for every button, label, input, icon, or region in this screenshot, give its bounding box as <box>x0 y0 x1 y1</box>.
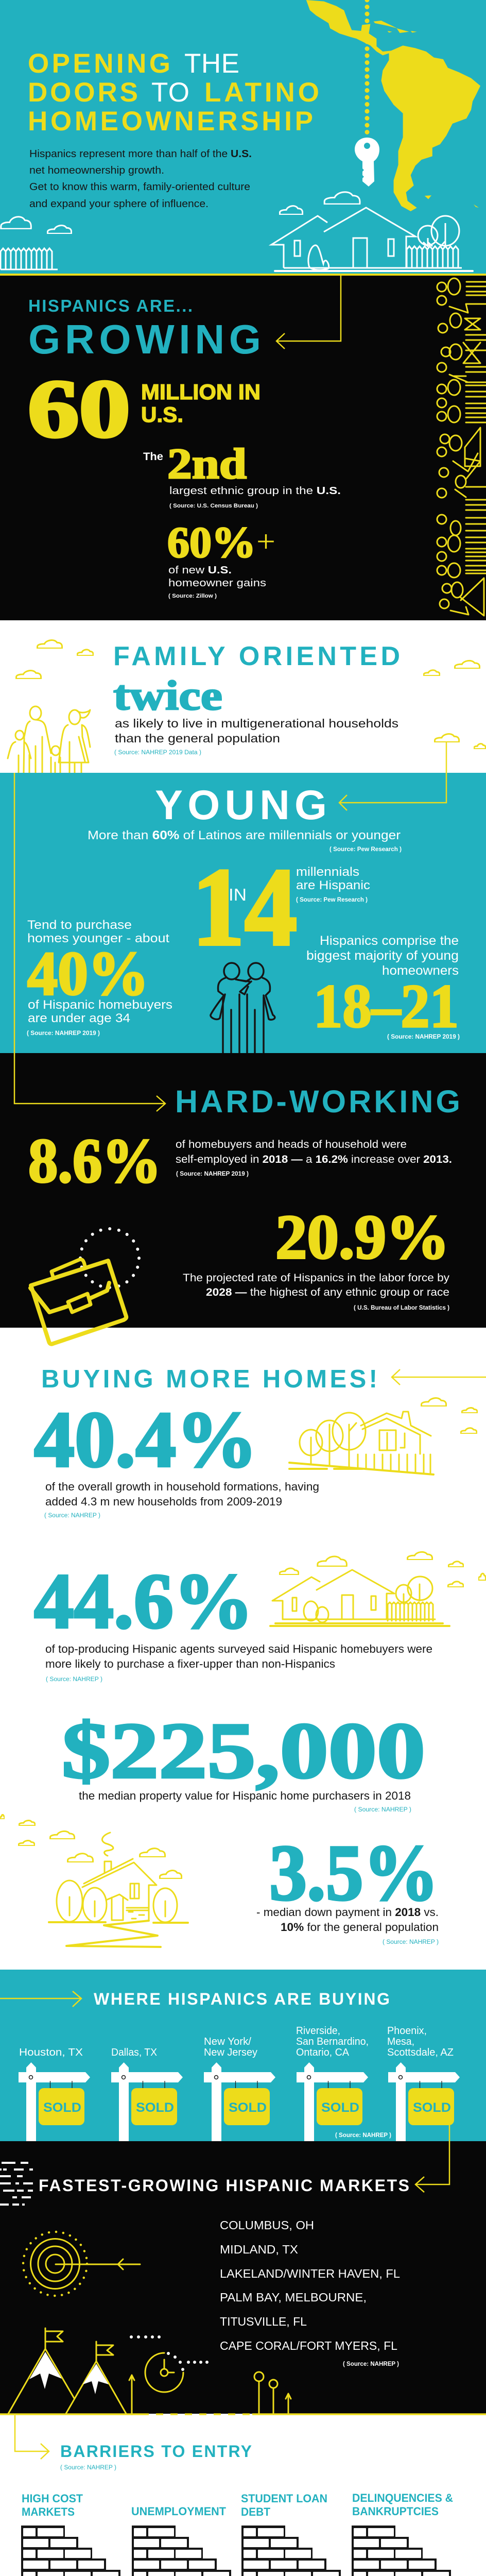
market list: COLUMBUS, OH <box>220 2218 314 2232</box>
icon: sold sign 1: SOLD <box>43 2100 81 2115</box>
stat: 18-21: Hispanics comprise the <box>320 934 459 948</box>
intro text: and expand your sphere of influence. <box>29 198 209 210</box>
stat: 60% plus: homeowner gains <box>168 578 266 589</box>
stat: 2nd largest: ( Source: U.S. Census Bureau ) <box>169 503 258 509</box>
market list: CAPE CORAL/FORT MYERS, FL <box>220 2339 397 2352</box>
arrow to where <box>0 1991 81 2007</box>
title <box>28 48 319 137</box>
market list: LAKELAND/WINTER HAVEN, FL <box>220 2267 400 2280</box>
city labels <box>19 2025 454 2058</box>
market list: PALM BAY, MELBOURNE, <box>220 2291 367 2304</box>
map of Latin America <box>306 0 480 211</box>
icon: family <box>8 706 90 773</box>
stat: 18-21 <box>306 934 460 1040</box>
icon: two friends <box>211 963 275 1053</box>
stat: 60% plus <box>167 518 275 599</box>
city labels: New York/ <box>204 2036 251 2047</box>
city labels: Houston, TX <box>19 2047 83 2058</box>
stat: 20.9% <box>183 1202 450 1311</box>
heading: buying more homes: BUYING MORE HOMES! <box>41 1365 377 1393</box>
market list: MIDLAND, TX <box>220 2243 298 2256</box>
icon: target and arrow <box>23 2232 140 2296</box>
panel: fastest-growing markets <box>0 2125 486 2415</box>
market list <box>220 2218 400 2352</box>
panel: buying more homes <box>0 1328 486 1970</box>
stat: 60 million: MILLION IN <box>141 380 261 404</box>
panel: young <box>0 742 486 1053</box>
stat: 18-21: 18–21 <box>314 972 459 1040</box>
stat: 40%: Tend to purchase <box>27 918 132 932</box>
icon: sold sign 2: SOLD <box>136 2100 174 2115</box>
city labels: Riverside, <box>296 2025 340 2037</box>
stat: 40.4%: ( Source: NAHREP ) <box>44 1513 100 1519</box>
icon: sold sign 4: SOLD <box>321 2100 359 2115</box>
stat: 3.5%: - median down payment in 2018 vs. <box>256 1906 439 1919</box>
icon: house with trees <box>289 1398 477 1475</box>
stat: 20.9%: ( U.S. Bureau of Labor Statistics ) <box>354 1305 449 1311</box>
stat: 1 in 4 <box>192 845 370 969</box>
icon: growth arrows and clock <box>129 2335 291 2415</box>
stat: 44.6%: of top-producing Hispanic agents surveyed said Hispanic homebuyers were <box>45 1642 432 1655</box>
young intro: More than 60% of Latinos are millennials or younger <box>88 828 401 842</box>
stat: 44.6% <box>34 1558 432 1683</box>
stat: 40%: are under age 34 <box>28 1011 130 1025</box>
family text: as likely to live in multigenerational households <box>115 717 398 730</box>
barrier: student loan debt <box>241 2492 354 2576</box>
stat: 60 million: U.S. <box>141 402 183 427</box>
stat: 1 in 4: ( Source: Pew Research ) <box>296 897 368 903</box>
heading: where: WHERE HISPANICS ARE BUYING <box>94 1990 390 2008</box>
family text <box>114 717 398 756</box>
family text: than the general population <box>115 732 280 745</box>
heading: fastest-growing: FASTEST-GROWING HISPANIC MARKETS <box>39 2176 409 2195</box>
icon: briefcase <box>30 1229 139 1344</box>
title: TO <box>151 77 189 108</box>
stat: 44.6%: ( Source: NAHREP ) <box>46 1676 102 1683</box>
barrier: student loan debt: STUDENT LOAN <box>241 2492 327 2505</box>
stat: 8.6% <box>28 1126 452 1196</box>
panel: barriers to entry <box>0 2415 486 2576</box>
heading: family oriented: FAMILY ORIENTED <box>113 641 400 671</box>
barrier: delinquencies and bankruptcies: DELINQUENCIES & <box>352 2492 453 2504</box>
stat: 40.4%: added 4.3 m new households from 2009-2019 <box>45 1495 282 1508</box>
city labels: Phoenix, <box>387 2025 427 2037</box>
stat: 44.6%: 44.6% <box>34 1558 253 1645</box>
stat: 3.5%: 10% for the general population <box>281 1921 439 1934</box>
arrow to barriers <box>15 2415 49 2459</box>
panel: growing <box>0 274 486 620</box>
icon: house <box>270 1552 486 1626</box>
stat: twice: twice <box>113 672 222 719</box>
stat: 8.6%: 8.6% <box>28 1126 161 1196</box>
stat: 60% plus: of new U.S. <box>168 565 232 576</box>
stat: 40.4%: 40.4% <box>34 1395 257 1484</box>
stat: 60 million <box>28 363 261 454</box>
stat: 18-21: ( Source: NAHREP 2019 ) <box>387 1034 460 1040</box>
icon: sold sign 4 <box>297 2062 368 2141</box>
arrow to buying <box>392 1369 486 1385</box>
city labels: Ontario, CA <box>296 2047 350 2058</box>
heading: hard-working: HARD-WORKING <box>175 1084 460 1119</box>
stat: median property value: ( Source: NAHREP ) <box>354 1807 411 1813</box>
icon: sold sign 5: SOLD <box>413 2100 451 2115</box>
stat: 8.6%: of homebuyers and heads of household were <box>176 1139 407 1150</box>
icon: key <box>355 138 379 187</box>
stat: 60% plus: ( Source: Zillow ) <box>168 593 217 599</box>
heading: barriers: ( Source: NAHREP ) <box>60 2465 116 2471</box>
stat: 60% plus: + <box>256 524 275 558</box>
arrow to fastest-growing <box>415 2125 449 2192</box>
icon: mountains and flags <box>8 2328 126 2414</box>
icon: sold sign 1 <box>19 2062 90 2141</box>
panel: header <box>0 0 486 274</box>
stat: 8.6%: ( Source: NAHREP 2019 ) <box>176 1171 249 1177</box>
stat: 2nd largest <box>143 440 341 509</box>
stat: 3.5%: 3.5% <box>269 1828 439 1917</box>
ground line <box>0 2413 486 2415</box>
icon: cottage with path <box>0 1815 188 1947</box>
stat: 2nd largest: The <box>143 451 163 463</box>
stat: 20.9%: 2028 — the highest of any ethnic group or race <box>206 1286 449 1298</box>
stat: 40%: 40% <box>27 939 149 1008</box>
stat: 40%: homes younger - about <box>27 931 169 945</box>
title: LATINO <box>204 77 319 108</box>
panel: hard-working <box>0 773 486 1344</box>
icon: sold sign 3: SOLD <box>229 2100 267 2115</box>
panel: family oriented <box>0 620 486 773</box>
stat: 18-21: biggest majority of young <box>306 948 459 963</box>
icon: sold sign 5 <box>388 2062 460 2141</box>
market list: TITUSVILLE, FL <box>220 2315 307 2328</box>
source note: ( Source: NAHREP ) <box>335 2132 391 2139</box>
stat: median property value: $225,000 <box>62 1706 425 1795</box>
young intro <box>88 828 402 853</box>
clouds <box>1 192 360 233</box>
stat: 1 in 4: IN <box>229 885 247 904</box>
crowd pattern <box>437 278 486 616</box>
stat: 18-21: homeowners <box>382 963 459 978</box>
title: DOORS <box>28 77 138 108</box>
stat: 1 in 4: 14 <box>192 845 297 969</box>
dotted key chain <box>364 0 370 135</box>
arrow to growing <box>276 276 341 349</box>
heading: growing: HISPANICS ARE... <box>28 296 193 315</box>
stat: 40%: of Hispanic homebuyers <box>28 998 172 1012</box>
stat: 40.4%: of the overall growth in household formations, having <box>45 1480 319 1493</box>
family text: ( Source: NAHREP 2019 Data ) <box>114 750 201 756</box>
barrier: student loan debt: DEBT <box>241 2505 271 2518</box>
stat: median property value: the median property value for Hispanic home purchasers in 2018 <box>79 1789 411 1802</box>
barrier: delinquencies and bankruptcies <box>352 2492 464 2576</box>
panel: where Hispanics are buying <box>0 1970 486 2141</box>
morse dashes <box>0 2163 33 2205</box>
stat: 60% plus: 60% <box>167 518 256 567</box>
city labels: New Jersey <box>204 2047 257 2058</box>
icon: house with trees <box>271 208 473 271</box>
left fence <box>1 248 58 269</box>
heading: barriers <box>60 2442 252 2471</box>
stat: 2nd largest: 2nd <box>167 440 247 488</box>
stat: 3.5% <box>256 1828 439 1945</box>
arrow to hard-working <box>14 773 165 1111</box>
barrier: high cost markets: HIGH COST <box>22 2492 83 2505</box>
arrow to young <box>339 742 446 810</box>
barrier: unemployment <box>131 2505 244 2576</box>
stat: 1 in 4: millennials <box>296 865 359 879</box>
stat: 1 in 4: are Hispanic <box>296 878 370 892</box>
city labels: Mesa, <box>387 2036 414 2047</box>
stat: 2nd largest: largest ethnic group in the U.S. <box>169 485 341 497</box>
intro text: Get to know this warm, family-oriented culture <box>29 181 250 193</box>
heading: young: YOUNG <box>155 782 327 828</box>
city labels: Dallas, TX <box>111 2047 157 2058</box>
intro text: net homeownership growth. <box>29 165 164 176</box>
clouds <box>16 640 485 749</box>
stat: 40.4% <box>34 1395 319 1519</box>
stat: 20.9%: 20.9% <box>275 1202 449 1272</box>
young intro: ( Source: Pew Research ) <box>329 846 402 853</box>
barrier: unemployment: UNEMPLOYMENT <box>131 2505 227 2518</box>
title: OPENING <box>28 48 170 79</box>
title: THE <box>184 48 239 79</box>
intro text <box>29 148 252 210</box>
heading: growing: GROWING <box>28 316 261 362</box>
barrier: high cost markets: MARKETS <box>22 2505 75 2518</box>
stat: median property value <box>62 1706 425 1813</box>
heading: barriers: BARRIERS TO ENTRY <box>60 2442 252 2461</box>
stat: 60 million: 60 <box>28 363 130 454</box>
title: HOMEOWNERSHIP <box>28 106 313 137</box>
source note: ( Source: NAHREP ) <box>343 2361 399 2367</box>
city labels: Scottsdale, AZ <box>387 2047 454 2058</box>
stat: 20.9%: The projected rate of Hispanics in the labor force by <box>183 1272 450 1284</box>
icon: sold sign 2 <box>111 2062 183 2141</box>
stat: 40% <box>27 918 172 1037</box>
barrier: delinquencies and bankruptcies: BANKRUPTCIES <box>352 2505 439 2518</box>
stat: 3.5%: ( Source: NAHREP ) <box>383 1939 439 1945</box>
heading: growing <box>28 296 261 362</box>
icon: sold sign 3 <box>204 2062 275 2141</box>
barrier: high cost markets <box>21 2492 133 2576</box>
city labels: San Bernardino, <box>296 2036 369 2047</box>
stat: 8.6%: self-employed in 2018 — a 16.2% increase over 2013. <box>176 1154 452 1165</box>
stat: 44.6%: more likely to purchase a fixer-upper than non-Hispanics <box>45 1657 335 1670</box>
stat: 40%: ( Source: NAHREP 2019 ) <box>27 1030 100 1037</box>
intro text: Hispanics represent more than half of the U.S. <box>29 148 252 160</box>
